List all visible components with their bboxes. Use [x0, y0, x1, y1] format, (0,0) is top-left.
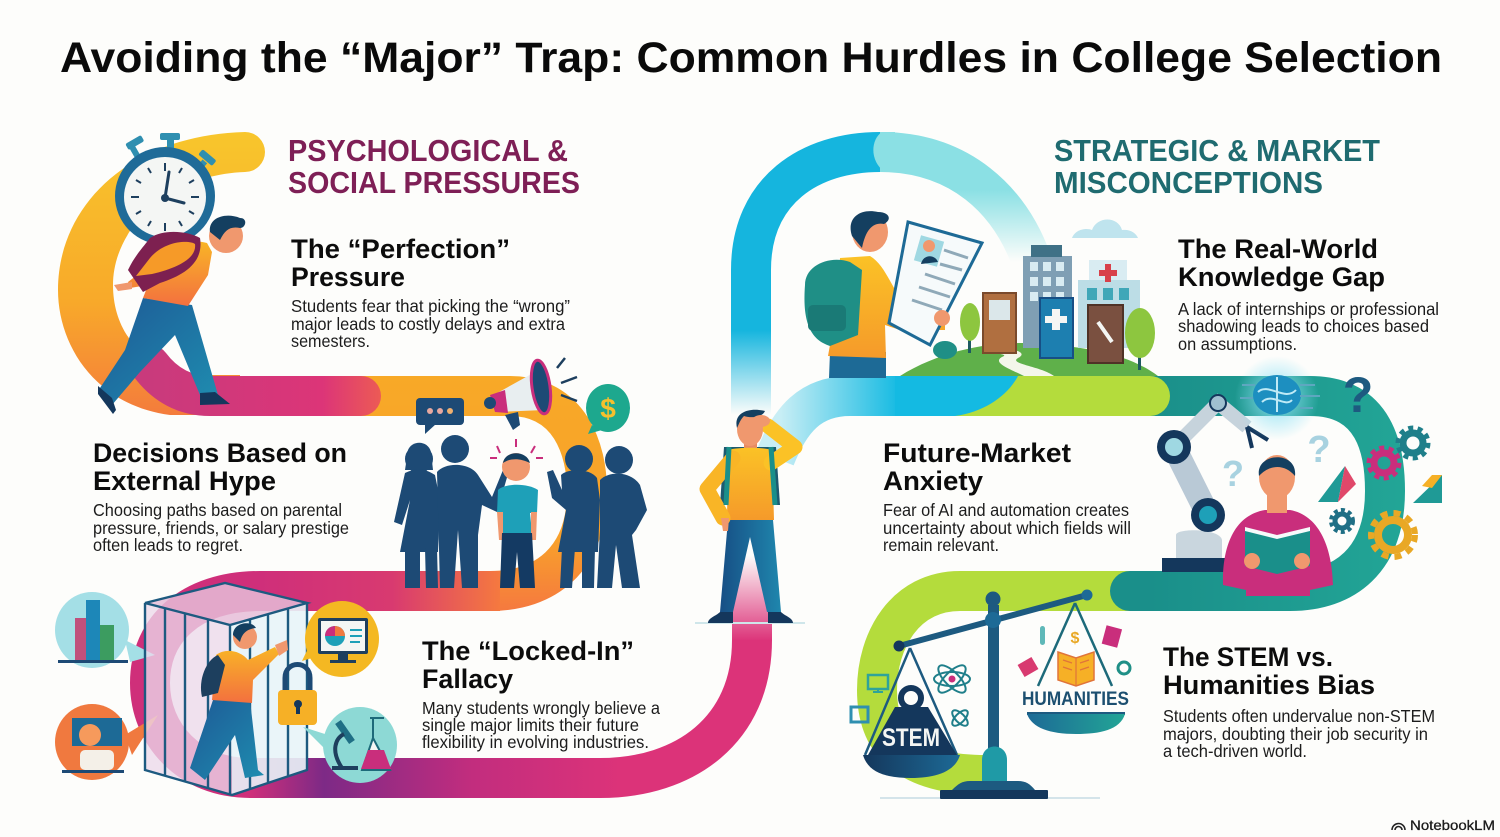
- text block: the real-world knowledge gap: [1178, 234, 1439, 354]
- text block: the perfection pressure: The “Perfection”: [291, 234, 510, 264]
- icon: humanities pan: [1018, 603, 1130, 734]
- figure: thinking student at the crossroads: [695, 410, 805, 624]
- text block: the locked-in fallacy: The “Locked-In”: [422, 636, 634, 666]
- text block: decisions based on external hype: [93, 438, 349, 555]
- figure: student reading a book: [1223, 455, 1333, 596]
- question marks: ?: [1307, 429, 1331, 471]
- illustration: robot arm and AI anxiety: [1157, 356, 1442, 596]
- section heading: strategic and market misconceptions: STRATEGIC & MARKET: [1054, 133, 1380, 168]
- text block: the stem vs. humanities bias: majors, doubting their job security in: [1163, 724, 1428, 744]
- icon: dollar bubble: $: [600, 393, 616, 424]
- icon: city bubble: [55, 592, 155, 668]
- question marks: ?: [1343, 367, 1373, 423]
- text block: the perfection pressure: [291, 234, 570, 351]
- title: Avoiding the “Major” Trap: Common Hurdles in College Selection: [60, 34, 1442, 82]
- figure: walking student: [98, 216, 245, 414]
- text block: the perfection pressure: Pressure: [291, 262, 405, 292]
- text block: the stem vs. humanities bias: [1163, 642, 1435, 761]
- section heading: psychological and social pressures: SOCIAL PRESSURES: [288, 165, 580, 200]
- career doors: [983, 293, 1123, 363]
- icon: chat bubble: [416, 398, 464, 434]
- text block: the locked-in fallacy: flexibility in evolving industries.: [422, 732, 649, 752]
- icon: remote worker bubble: [55, 704, 158, 780]
- icon: stopwatch: [115, 133, 216, 245]
- cage: [145, 583, 307, 795]
- icon: dollar bubble: [586, 384, 630, 434]
- icon: stem weight: [863, 648, 960, 778]
- text block: the stem vs. humanities bias: Students often undervalue non-STEM: [1163, 706, 1435, 726]
- watermark: NotebookLM: NotebookLM: [1410, 817, 1495, 833]
- text block: the perfection pressure: semesters.: [291, 331, 370, 351]
- section heading: psychological and social pressures: [288, 133, 580, 200]
- illustration: student in a cage with career bubbles: [55, 583, 397, 795]
- text block: the stem vs. humanities bias: The STEM vs.: [1163, 642, 1333, 672]
- section heading: psychological and social pressures: PSYCHOLOGICAL &: [288, 133, 568, 168]
- section heading: strategic and market misconceptions: MISCONCEPTIONS: [1054, 165, 1323, 200]
- text block: future-market anxiety: Fear of AI and automation creates: [883, 500, 1129, 520]
- trees: [933, 303, 1155, 370]
- text block: the locked-in fallacy: Many students wrongly believe a: [422, 698, 660, 718]
- text block: future-market anxiety: [883, 438, 1131, 555]
- question marks: [1222, 367, 1373, 494]
- icon: monitor bubble: [302, 601, 379, 677]
- text block: future-market anxiety: Future-Market: [883, 438, 1071, 468]
- text block: future-market anxiety: Anxiety: [883, 466, 983, 496]
- text block: future-market anxiety: uncertainty about which fields will: [883, 518, 1131, 538]
- text block: the real-world knowledge gap: on assumptions.: [1178, 334, 1297, 354]
- icon: cloud: [1072, 220, 1138, 238]
- icon: padlock: [278, 664, 317, 725]
- icon: robot arm: [1157, 395, 1268, 572]
- question marks: ?: [1222, 453, 1244, 494]
- hill with winding path: [900, 343, 1158, 376]
- text block: the locked-in fallacy: single major limits their future: [422, 715, 639, 735]
- text block: the real-world knowledge gap: Knowledge Gap: [1178, 262, 1385, 292]
- gears and shapes: [1318, 428, 1442, 557]
- icon: microscope and flask bubble: [303, 707, 397, 783]
- figure: student with backpack: [804, 211, 945, 378]
- icon: science symbols: [851, 661, 970, 728]
- text block: the locked-in fallacy: Fallacy: [422, 664, 513, 694]
- icon: megaphone: [484, 358, 577, 430]
- text block: the real-world knowledge gap: shadowing leads to choices based: [1178, 316, 1429, 336]
- winding path: strategic side: [751, 132, 1385, 775]
- figure: family and friends silhouettes: [394, 435, 647, 588]
- text block: decisions based on external hype: Decisions Based on: [93, 438, 347, 468]
- text block: the locked-in fallacy: [422, 636, 660, 752]
- text block: the real-world knowledge gap: A lack of internships or professional: [1178, 299, 1439, 319]
- illustration: crowd with hype: [394, 358, 647, 588]
- text block: the perfection pressure: Students fear that picking the “wrong”: [291, 296, 570, 316]
- text block: future-market anxiety: remain relevant.: [883, 535, 999, 555]
- icon: humanities pan: HUMANITIES: [1022, 689, 1129, 710]
- text block: decisions based on external hype: External Hype: [93, 466, 276, 496]
- text block: the real-world knowledge gap: The Real-World: [1178, 234, 1378, 264]
- career buildings: [1023, 245, 1140, 348]
- icon: humanities pan: $: [1071, 630, 1080, 647]
- illustration: stem versus humanities scale: [851, 590, 1130, 799]
- icon: resume document: [889, 222, 982, 345]
- text block: decisions based on external hype: pressure, friends, or salary prestige: [93, 518, 349, 538]
- text block: decisions based on external hype: often leads to regret.: [93, 535, 243, 555]
- section heading: strategic and market misconceptions: [1054, 133, 1380, 200]
- figure: student in cage: [190, 623, 288, 780]
- text block: decisions based on external hype: Choosing paths based on parental: [93, 500, 342, 520]
- illustration: student reading a job profile with career doors: [804, 211, 1158, 378]
- text block: the perfection pressure: major leads to costly delays and extra: [291, 314, 565, 334]
- icon: stem weight: STEM: [882, 724, 940, 752]
- text block: the stem vs. humanities bias: Humanities Bias: [1163, 670, 1375, 700]
- illustration: student carrying a clock: [98, 133, 245, 414]
- text block: the stem vs. humanities bias: a tech-driven world.: [1163, 741, 1307, 761]
- icon: scale frame: [894, 590, 1092, 799]
- figure: pressured student: [490, 439, 543, 588]
- icon: glowing brain: [1235, 356, 1320, 440]
- winding path: psychological side: [58, 132, 772, 778]
